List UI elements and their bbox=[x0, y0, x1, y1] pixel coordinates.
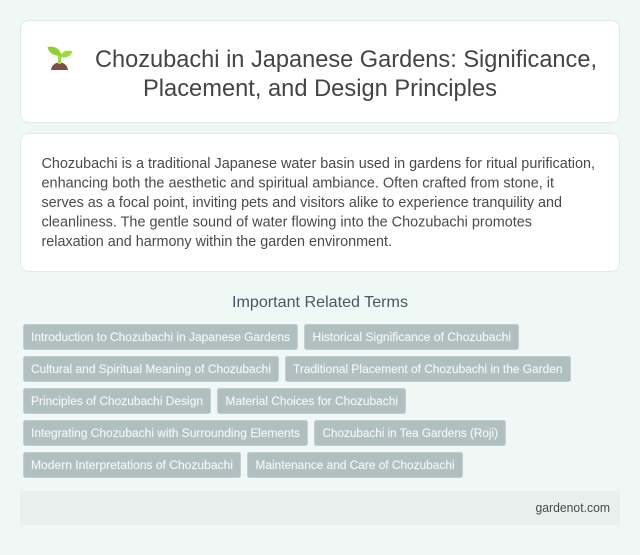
tag bbox=[24, 356, 278, 382]
tag bbox=[24, 324, 298, 350]
tag bbox=[314, 420, 506, 446]
tag bbox=[248, 452, 462, 478]
description text bbox=[42, 156, 595, 250]
tag: Historical Significance of Chozubachi bbox=[312, 330, 511, 344]
description text: relaxation and harmony within the garden environment. bbox=[42, 234, 392, 250]
tag bbox=[304, 324, 518, 350]
tag: Material Choices for Chozubachi bbox=[226, 394, 398, 408]
title: Chozubachi in Japanese Gardens: Significance, bbox=[95, 46, 597, 73]
tag: Modern Interpretations of Chozubachi bbox=[31, 458, 233, 472]
tag bbox=[24, 420, 308, 446]
title bbox=[95, 46, 597, 102]
tag: Integrating Chozubachi with Surrounding Elements bbox=[31, 426, 300, 440]
panel: header bbox=[20, 20, 620, 122]
description text: cleanliness. The gentle sound of water flowing into the Chozubachi promotes bbox=[42, 214, 532, 230]
tag bbox=[218, 388, 406, 414]
heading: important related terms: Important Related Terms bbox=[232, 294, 408, 311]
tag: Traditional Placement of Chozubachi in the Garden bbox=[293, 362, 563, 376]
title: Placement, and Design Principles bbox=[143, 75, 497, 102]
tag: Principles of Chozubachi Design bbox=[31, 394, 203, 408]
tag: Introduction to Chozubachi in Japanese Gardens bbox=[31, 330, 290, 344]
tags list bbox=[24, 324, 570, 478]
tag bbox=[286, 356, 570, 382]
tag: Maintenance and Care of Chozubachi bbox=[256, 458, 454, 472]
tag: Cultural and Spiritual Meaning of Chozubachi bbox=[31, 362, 271, 376]
footer bbox=[20, 491, 620, 525]
panel: description bbox=[20, 134, 620, 272]
description text: serves as a focal point, inviting pets and visitors alike to experience tranquility and bbox=[42, 195, 562, 211]
icon: seedling bbox=[48, 47, 72, 70]
tag: Chozubachi in Tea Gardens (Roji) bbox=[322, 426, 498, 440]
tag bbox=[24, 452, 240, 478]
description text: Chozubachi is a traditional Japanese water basin used in gardens for ritual purification, bbox=[42, 156, 595, 172]
tag bbox=[24, 388, 210, 414]
footer source text: gardenot.com bbox=[536, 501, 610, 515]
description text: enhancing both the aesthetic and spiritual ambiance. Often crafted from stone, it bbox=[42, 176, 554, 192]
